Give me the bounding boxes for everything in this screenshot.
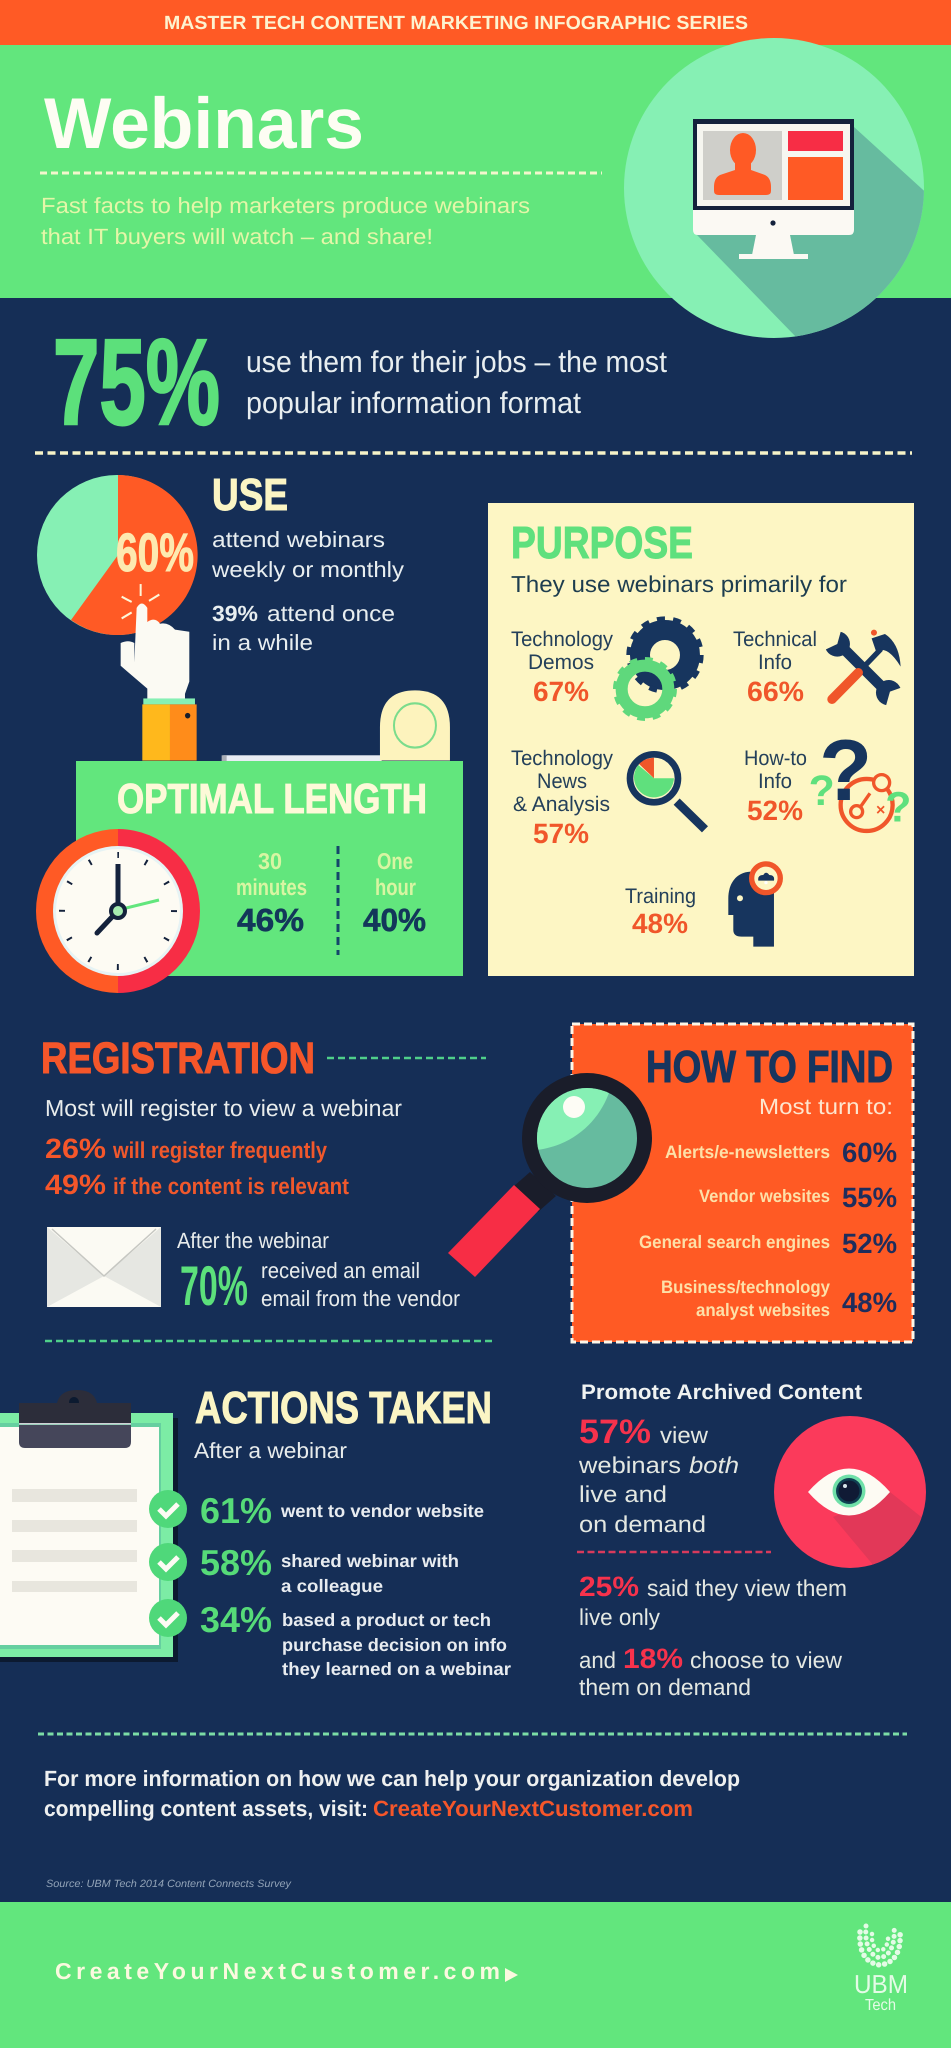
- how to find list: [639, 1137, 897, 1320]
- purpose item: technology demos: Technology: [511, 628, 613, 651]
- panel: optimal length: [76, 761, 463, 976]
- purpose item: training: [625, 885, 696, 939]
- icon: magnifier with pie: [630, 754, 705, 829]
- icon: question marks: ×: [876, 801, 885, 819]
- purpose item: technology news and analysis: [511, 747, 613, 849]
- icon: head: [728, 864, 780, 947]
- icon: clock: [36, 829, 200, 993]
- header subtitle: that IT buyers will watch – and share!: [41, 224, 433, 249]
- purpose item: technical info: 66%: [747, 676, 804, 707]
- stat: one hour: 40%: [363, 902, 426, 938]
- footer url: CreateYourNextCustomer.com: [55, 1958, 500, 1984]
- actions list: purchase decision on info: [282, 1635, 507, 1655]
- email stat: 70%: [180, 1254, 248, 1317]
- big stat: 75%: [53, 314, 668, 450]
- call to action text: CreateYourNextCustomer.com: [373, 1796, 693, 1821]
- icon: pointing hand with sleeve: [121, 584, 197, 761]
- icon: eye: [774, 1416, 926, 1568]
- header subtitle: [41, 193, 530, 249]
- email stat: email from the vendor: [261, 1286, 460, 1311]
- actions intro: After a webinar: [194, 1438, 347, 1463]
- icon: arrow: [505, 1968, 518, 1982]
- purpose item: technology demos: [511, 628, 613, 707]
- actions list: went to vendor website: [280, 1501, 484, 1521]
- icon: question marks: ?: [819, 722, 872, 819]
- promote stat: both: 57%: [579, 1413, 651, 1451]
- stat: one hour: One: [377, 848, 413, 874]
- purpose heading: PURPOSE: [511, 517, 693, 568]
- length divider: [336, 846, 340, 955]
- stat: 30 minutes: minutes: [236, 874, 307, 900]
- optimal length heading: OPTIMAL LENGTH: [117, 775, 427, 822]
- promote stat: on demand: [579, 1643, 842, 1700]
- top banner: [0, 0, 951, 45]
- registration text: [45, 1095, 402, 1200]
- purpose item: technical info: Info: [758, 651, 792, 674]
- use text: attend webinars: [212, 527, 385, 552]
- registration bottom rule: [45, 1340, 495, 1342]
- purpose item: technology news and analysis: 57%: [533, 818, 589, 849]
- purpose item: training: Training: [625, 885, 696, 908]
- logo: UBM Tech: Tech: [865, 1997, 896, 2014]
- icon: tape dispenser: [222, 690, 450, 769]
- promote stat: both: webinars: [578, 1452, 681, 1478]
- icon: monitor in circle: [624, 38, 924, 338]
- stat: one hour: hour: [375, 874, 416, 900]
- how to find heading: HOW TO FIND: [646, 1041, 893, 1092]
- how to find list: 60%: [842, 1137, 897, 1168]
- promote rule: [577, 1551, 771, 1553]
- actions list: a colleague: [281, 1576, 383, 1596]
- purpose item: technical info: [733, 628, 817, 707]
- actions list: [200, 1490, 511, 1679]
- stat: 30 minutes: [236, 848, 307, 938]
- call to action text: For more information on how we can help your organization develop: [44, 1766, 740, 1791]
- purpose item: technology news and analysis: & Analysis: [513, 793, 610, 816]
- use heading: USE: [212, 469, 288, 520]
- source note: Source: UBM Tech 2014 Content Connects Survey: [46, 1878, 292, 1890]
- icon: question marks: [809, 722, 911, 831]
- promote stat: live only: said they view them: [647, 1575, 847, 1601]
- email stat: received an email: [261, 1258, 420, 1283]
- use text: attend once: [267, 601, 395, 626]
- icon: clipboard: [0, 1390, 178, 1662]
- promote stat: live only: [579, 1571, 847, 1630]
- promote stat: on demand: and: [579, 1647, 616, 1673]
- how to find list: 52%: [842, 1228, 897, 1259]
- use text: 39%: [212, 601, 258, 626]
- purpose item: how-to info: Info: [758, 770, 792, 793]
- big stat: 75%: 75%: [53, 314, 220, 450]
- big stat: 75%: use them for their jobs – the most: [246, 346, 668, 379]
- promote archived content heading: Promote Archived Content: [581, 1381, 862, 1404]
- purpose item: technical info: Technical: [733, 628, 817, 651]
- header subtitle: Fast facts to help marketers produce webinars: [41, 193, 530, 218]
- email stat: After the webinar: [177, 1228, 329, 1253]
- use text: in a while: [212, 630, 313, 655]
- logo: UBM Tech: UBM: [854, 1969, 908, 1999]
- promote stat: on demand: 18%: [623, 1643, 683, 1674]
- panel: purpose: [488, 503, 914, 976]
- how to find list: analyst websites: [696, 1300, 830, 1320]
- actions list: 61%: [200, 1490, 272, 1531]
- promote stat: both: both: [689, 1452, 739, 1478]
- how to find list: Business/technology: [661, 1277, 830, 1297]
- registration text: 49%: [45, 1169, 106, 1200]
- how to find list: Vendor websites: [699, 1186, 830, 1206]
- header divider: [40, 172, 602, 174]
- pie chart: use: 60%: [116, 523, 194, 583]
- footer band: [0, 1902, 951, 2048]
- promote stat: live only: live only: [579, 1604, 660, 1630]
- how to find intro: Most turn to:: [759, 1094, 893, 1119]
- purpose item: how-to info: [744, 747, 807, 826]
- promote stat: both: view: [660, 1422, 708, 1448]
- icon: question marks: ?: [885, 783, 911, 831]
- promote stat: on demand: choose to view: [690, 1647, 842, 1673]
- registration text: will register frequently: [112, 1137, 327, 1163]
- actions list: 34%: [200, 1599, 272, 1640]
- actions list: based a product or tech: [282, 1610, 491, 1630]
- icon: envelope: [47, 1227, 161, 1307]
- purpose item: technology news and analysis: News: [537, 770, 587, 793]
- promote stat: live only: 25%: [579, 1571, 639, 1602]
- logo: UBM Tech: [854, 1926, 908, 2014]
- stat: 30 minutes: 46%: [237, 902, 304, 938]
- purpose item: technology demos: 67%: [533, 676, 589, 707]
- footer rule: [38, 1732, 907, 1736]
- registration heading: REGISTRATION: [41, 1034, 315, 1083]
- header panel: [0, 45, 951, 298]
- purpose item: technology news and analysis: Technology: [511, 747, 613, 770]
- how to find list: 55%: [842, 1182, 897, 1213]
- actions list: they learned on a webinar: [282, 1659, 511, 1679]
- registration text: Most will register to view a webinar: [45, 1095, 402, 1121]
- how to find list: 48%: [842, 1287, 897, 1318]
- registration rule: [327, 1057, 486, 1059]
- actions list: shared webinar with: [281, 1551, 459, 1571]
- purpose item: training: 48%: [632, 908, 688, 939]
- icon: check marks: [149, 1490, 187, 1637]
- icon: large magnifying glass: [448, 1073, 652, 1277]
- promote stat: on demand: them on demand: [579, 1674, 751, 1700]
- actions list: 58%: [200, 1542, 272, 1583]
- pie chart: use: [37, 475, 198, 635]
- purpose item: how-to info: 52%: [747, 795, 803, 826]
- email stat: [177, 1228, 460, 1317]
- registration text: if the content is relevant: [113, 1173, 349, 1199]
- panel: how to find: [572, 1024, 913, 1342]
- icon: question marks: ?: [809, 767, 835, 814]
- icon: gears: [616, 619, 701, 718]
- registration text: 26%: [45, 1133, 106, 1164]
- purpose item: technology demos: Demos: [528, 651, 594, 674]
- how to find list: Alerts/e-newsletters: [665, 1142, 830, 1162]
- promote stat: both: live and: [579, 1481, 667, 1507]
- how to find list: General search engines: [639, 1232, 830, 1252]
- purpose item: how-to info: How-to: [744, 747, 807, 770]
- call to action text: [44, 1766, 740, 1821]
- icon: tools: [823, 628, 904, 708]
- use text: [211, 527, 404, 655]
- call to action text: compelling content assets, visit:: [44, 1796, 368, 1821]
- stat: 30 minutes: 30: [258, 848, 282, 874]
- purpose intro: They use webinars primarily for: [511, 571, 847, 597]
- use text: weekly or monthly: [211, 557, 404, 582]
- promote stat: both: [578, 1413, 739, 1537]
- top banner: MASTER TECH CONTENT MARKETING INFOGRAPHIC SERIES: [164, 13, 748, 34]
- stat: one hour: [363, 848, 426, 938]
- title: Webinars: [44, 84, 364, 164]
- promote stat: both: on demand: [579, 1511, 706, 1537]
- actions taken heading: ACTIONS TAKEN: [195, 1382, 492, 1433]
- section divider: [35, 451, 912, 455]
- big stat: 75%: popular information format: [246, 387, 582, 420]
